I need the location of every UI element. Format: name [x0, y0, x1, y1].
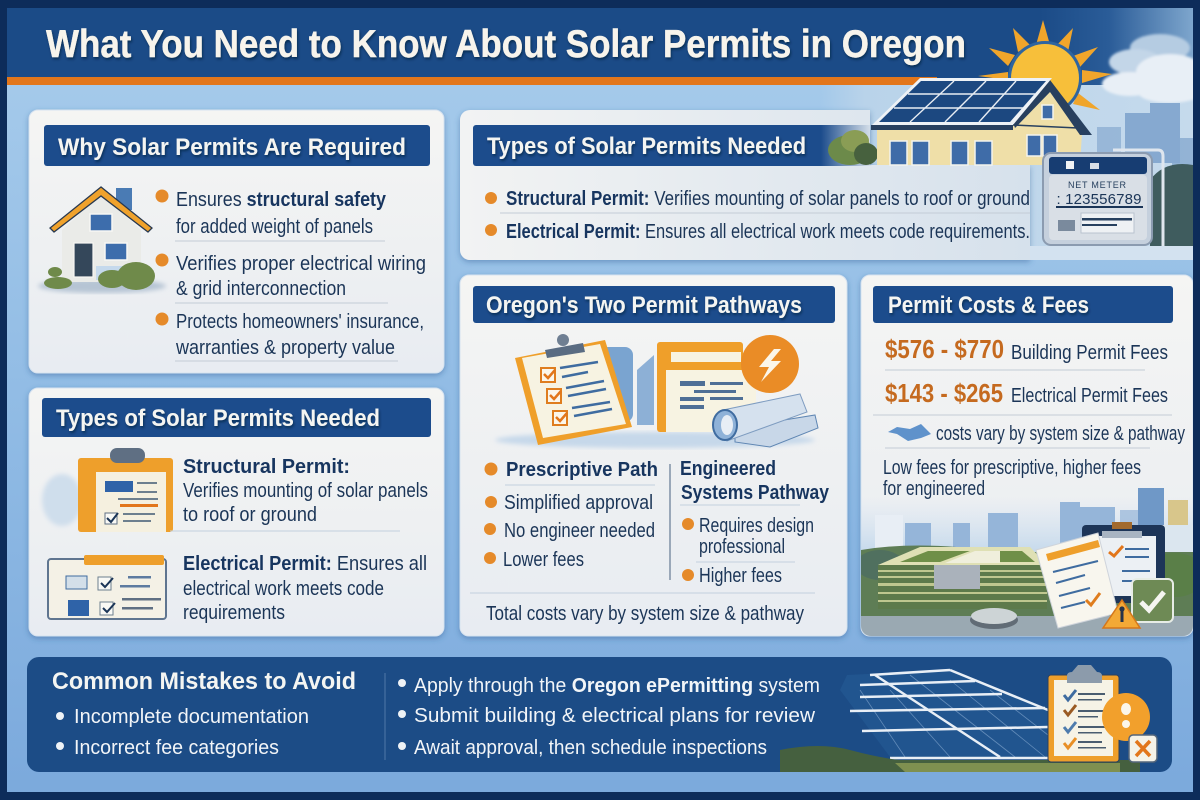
icon: warning triangle: [1103, 600, 1140, 628]
clouds in sky: [1102, 34, 1200, 103]
column: prescriptive path: Lower fees: [503, 549, 584, 571]
item: electrical permit: Electrical Permit: Ensures all: [183, 553, 427, 575]
heading: Oregon's Two Permit Pathways: [486, 292, 802, 319]
fee: electrical: Electrical Permit Fees: [1011, 385, 1168, 407]
panel: common mistakes and next steps: [27, 657, 1172, 772]
fee: building: Building Permit Fees: [1011, 342, 1168, 364]
column: engineered systems pathway: professional: [699, 536, 785, 558]
skyline: [1097, 103, 1193, 178]
icon: folders: [637, 342, 756, 432]
mistakes list: Incomplete documentation: [74, 705, 309, 728]
column: prescriptive path: Simplified approval: [504, 492, 653, 514]
illustration: solar array: [780, 670, 1140, 772]
note: low fees: [883, 457, 1141, 500]
bullet: structural safety: for added weight of panels: [176, 216, 373, 238]
sky scene: [820, 34, 1200, 255]
item: structural permit: to roof or ground: [183, 504, 317, 526]
tree: [828, 130, 878, 165]
item: structural permit: Verifies mounting of solar panels: [183, 480, 428, 502]
header bar: [473, 286, 835, 323]
column: engineered systems pathway: [680, 458, 830, 587]
item: structural permit: Structural Permit:: [183, 456, 350, 478]
next steps list: Submit building & electrical plans for review: [414, 704, 815, 727]
next steps list: Await approval, then schedule inspections: [414, 736, 767, 759]
item: structural: Structural Permit: Verifies mounting of solar panels to roof or ground: [506, 188, 1030, 210]
column: engineered systems pathway: Requires design: [699, 515, 814, 537]
column: engineered systems pathway: Systems Pathway: [681, 482, 830, 504]
icon: map fold: [888, 424, 931, 441]
item: electrical permit: electrical work meets code: [183, 578, 384, 600]
column: engineered systems pathway: Engineered: [680, 458, 776, 480]
illustration: house with solar panels: [828, 78, 1092, 165]
header bar: [44, 125, 430, 166]
panel: types of solar permits, left: [29, 388, 444, 636]
icon: lightning badge: [741, 335, 799, 393]
mistakes list: [56, 705, 309, 759]
icon: checklist clipboard: [1048, 665, 1119, 762]
solar array: [879, 81, 1046, 122]
panel: permit costs and fees: [856, 275, 1200, 636]
heading: Types of Solar Permits Needed: [56, 405, 380, 432]
header bar: [42, 398, 431, 437]
item: electrical permit: [183, 553, 427, 624]
bullet: electrical wiring: [156, 253, 426, 300]
column: prescriptive path: [484, 459, 658, 571]
heading: Permit Costs & Fees: [888, 292, 1089, 319]
bullet: structural safety: Ensures structural safety: [176, 189, 387, 211]
icon: fee document: [1036, 533, 1118, 628]
fee: building: $576 - $770: [885, 334, 1004, 364]
heading: Types of Solar Permits Needed: [487, 133, 806, 160]
header bar: [473, 125, 873, 166]
bullet: electrical wiring: Verifies proper electrical wiring: [176, 253, 426, 275]
icon: net meter: [1043, 150, 1163, 246]
fee: building: [885, 334, 1168, 364]
icon: alert badge: [1102, 693, 1150, 741]
panel: why solar permits are required: [29, 110, 444, 373]
icon: coin: [970, 608, 1018, 629]
bullet: protects homeowners: [156, 311, 424, 359]
note: total costs: Total costs vary by system size & pathway: [486, 603, 804, 625]
icon: green check: [1132, 579, 1173, 622]
next steps list: [398, 674, 820, 759]
fee: electrical: [885, 378, 1168, 408]
skyline: [875, 488, 1193, 552]
column: prescriptive path: No engineer needed: [504, 520, 655, 542]
item: electrical: Electrical Permit: Ensures all electrical work meets code requirements.: [506, 221, 1030, 243]
heading: Why Solar Permits Are Required: [58, 134, 406, 161]
header bar: [873, 286, 1173, 323]
next steps list: Apply through the Oregon ePermitting system: [414, 674, 820, 697]
mistakes list: Incorrect fee categories: [74, 736, 279, 759]
panel: oregon's two permit pathways: [460, 275, 847, 636]
fee: electrical: $143 - $265: [885, 378, 1003, 408]
icon: sun: [978, 20, 1112, 115]
icon: stack of cash: [878, 547, 1047, 609]
column: engineered systems pathway: Higher fees: [699, 565, 782, 587]
icon: clipboard: [1082, 522, 1165, 603]
bullet: protects homeowners: warranties & property value: [175, 337, 395, 359]
illustration: city, cash and paperwork: [856, 488, 1200, 636]
icon: electrical folder: [48, 555, 166, 619]
bullet: electrical wiring: & grid interconnection: [176, 278, 346, 300]
note: low fees: for engineered: [883, 478, 985, 500]
windows: [890, 105, 1057, 165]
column: prescriptive path: Prescriptive Path: [506, 459, 658, 481]
icon: net meter: : 123556789: [1056, 191, 1142, 208]
icon: blueprint roll: [713, 394, 818, 447]
item: electrical permit: requirements: [183, 602, 285, 624]
icon: x box: [1129, 735, 1157, 762]
bullet: structural safety: [156, 189, 387, 238]
panel: types of solar permits, top: [460, 110, 1193, 260]
icon: structural folder: [42, 448, 173, 532]
trees behind meter: [1150, 164, 1193, 246]
bullet: protects homeowners: Protects homeowners' insurance,: [176, 311, 424, 333]
title: What You Need to Know About Solar Permits in Oregon: [46, 23, 966, 66]
heading: Common Mistakes to Avoid: [52, 668, 356, 695]
icon: net meter: NET METER: [1068, 180, 1126, 190]
item: structural permit: [183, 456, 428, 526]
orange rule: [7, 77, 937, 85]
icon: house: [38, 187, 166, 293]
icon: clipboard checklist: [515, 334, 633, 445]
banner: [7, 8, 1193, 86]
